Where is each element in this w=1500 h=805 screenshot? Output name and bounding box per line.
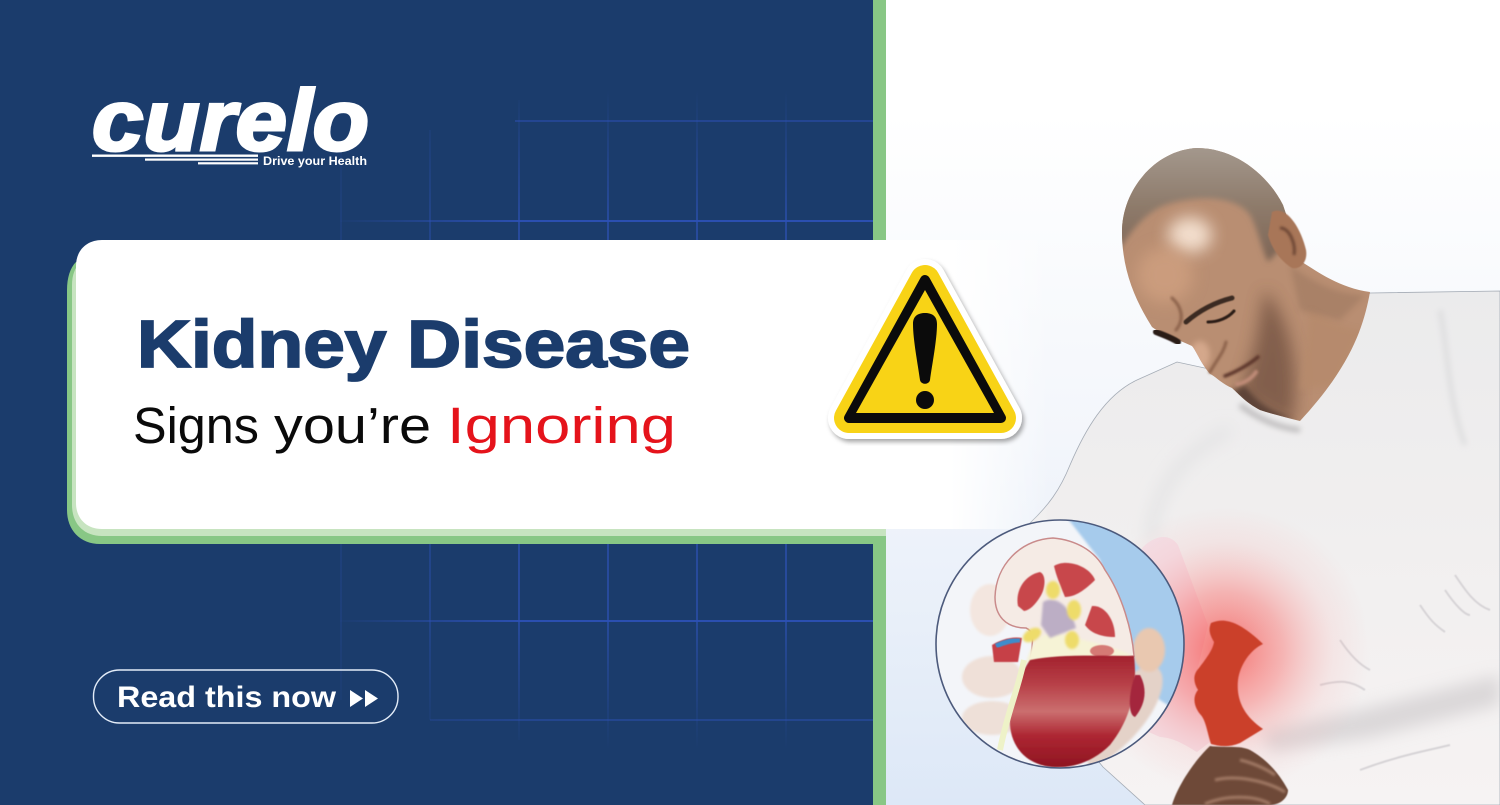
head and neck (1112, 135, 1370, 425)
logo speed lines (92, 154, 258, 164)
green vertical divider (873, 0, 886, 805)
hand behind kidney (962, 584, 1165, 772)
panel: photo background (886, 0, 1500, 805)
kidney pelvis (1041, 600, 1076, 638)
ureter (1000, 660, 1024, 750)
medullae (1017, 563, 1115, 657)
kidney section (995, 538, 1134, 662)
gap between arm and torso (1110, 537, 1210, 752)
arrows icon (350, 690, 378, 707)
icon: warning triangle (849, 280, 1001, 418)
logo tagline: Drive your Health (263, 154, 367, 168)
forearm shadow (1263, 675, 1500, 752)
card right fade (950, 240, 1050, 529)
card white face (76, 240, 950, 529)
background grid pattern (340, 90, 873, 750)
kidney model inset circle (936, 515, 1190, 772)
shirt (1000, 291, 1500, 805)
subtitle: Signs you're Ignoring: Ignoring (447, 397, 676, 454)
title: Kidney Disease: Kidney Disease (137, 307, 690, 382)
logo: curelo (92, 73, 369, 169)
hair (1122, 148, 1286, 262)
calyces (1020, 581, 1081, 649)
card green back edge (67, 262, 886, 544)
kidney outer red body (1010, 656, 1135, 767)
hand at waist (1172, 746, 1288, 805)
red fist (1194, 621, 1263, 746)
panel: white title card (67, 240, 1050, 544)
ear (1268, 211, 1306, 268)
card light green edge (72, 262, 886, 536)
subtitle: Signs you're Ignoring: Signs (133, 397, 259, 454)
person in white shirt (1000, 135, 1500, 805)
blue backdrop (1068, 521, 1184, 706)
sleeve folds (1320, 575, 1490, 770)
button: Read this now: Read this now (117, 681, 337, 714)
pain glow (1080, 505, 1370, 795)
blood vessels (992, 637, 1022, 662)
face features (1156, 298, 1258, 384)
subtitle: Signs you're Ignoring (133, 397, 676, 454)
fingers in front (1130, 675, 1145, 717)
subtitle: Signs you're Ignoring: you’re (274, 397, 431, 454)
logo wordmark: curelo (92, 73, 369, 169)
button: Read this now (94, 670, 398, 723)
panel: navy background (0, 0, 873, 805)
